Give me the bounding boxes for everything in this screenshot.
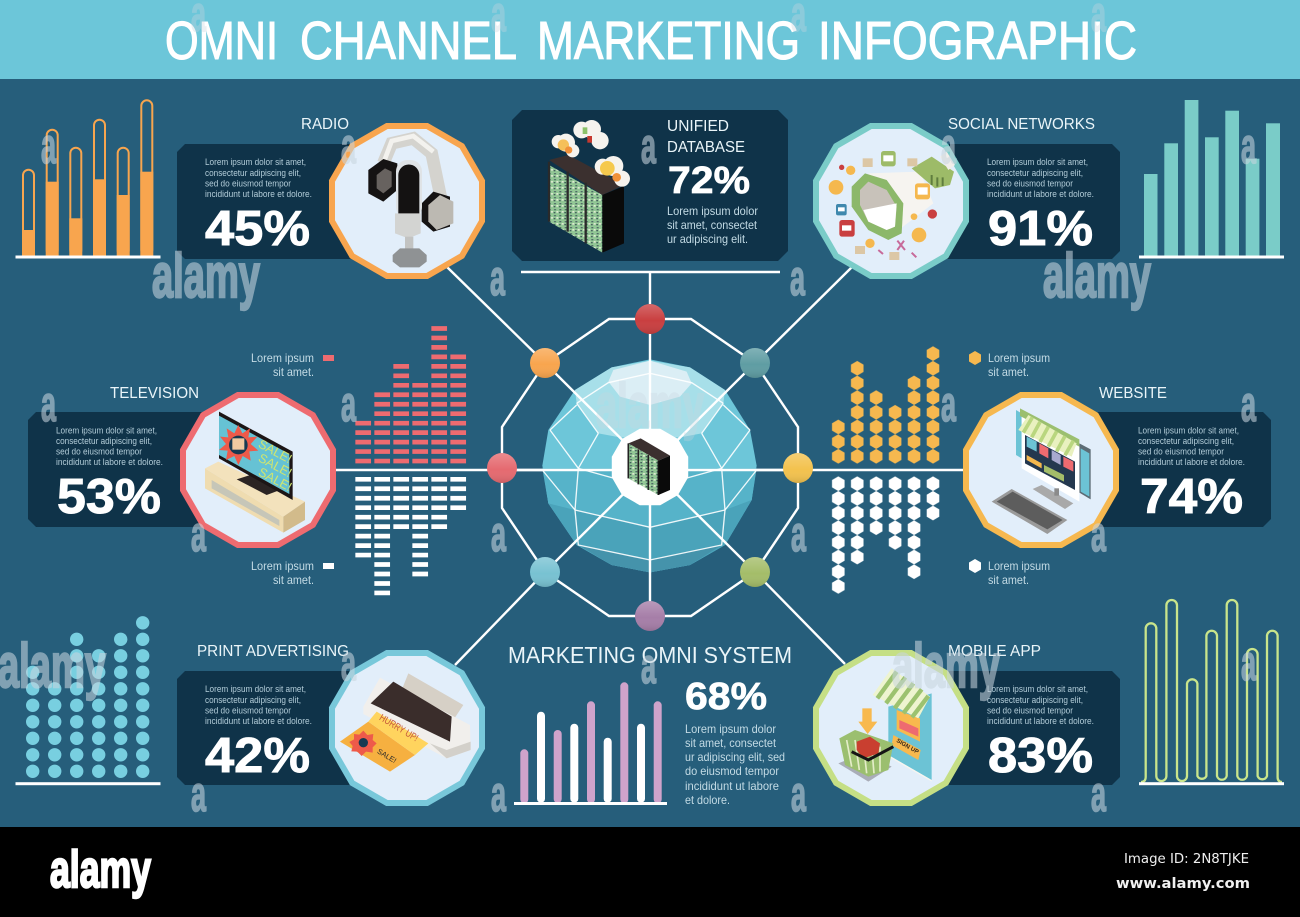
chart: lime outline meander [1139,600,1284,785]
watermark: a [341,376,357,432]
icon: radio badge with microphone and headphones [329,123,485,279]
legend: white [251,559,334,587]
chart: pink and white rounded bars [514,682,667,805]
television description [56,424,163,467]
header band [0,0,1300,79]
legend: white hexagon: sit amet. [988,573,1029,587]
television title: TELEVISION [110,385,199,402]
website title: WEBSITE [1099,385,1167,402]
watermark: a [1091,506,1107,562]
icon: print badge with printer: HURRY UP! [377,712,420,744]
watermark: a [41,118,57,174]
social description: consectetur adipiscing elit, [987,167,1083,178]
print description: sed do eiusmod tempor [205,704,291,716]
database title [667,118,745,156]
radio description [205,156,312,199]
icon: server racks with clouds [549,120,630,253]
social description: incididunt ut labore et dolore. [987,188,1094,199]
chart: blue dot columns [16,622,160,785]
social description [987,156,1094,199]
network spokes [502,319,798,616]
radio title: RADIO [301,116,349,133]
watermark: a [1241,635,1257,691]
print description [205,683,312,726]
footer bar [0,827,1300,917]
watermark: a [191,506,207,562]
radio description: Lorem ipsum dolor sit amet, [205,156,306,167]
mobile description: sed do eiusmod tempor [987,704,1073,716]
print description: Lorem ipsum dolor sit amet, [205,683,306,694]
watermark: a [941,118,957,174]
television description: consectetur adipiscing elit, [56,435,152,446]
watermark: a [1241,376,1257,432]
network octagon ring [502,319,798,616]
social title: SOCIAL NETWORKS [948,116,1095,133]
white hexagon chart [829,476,942,594]
legend: orange hexagon [969,351,1050,379]
title: CHANNEL [300,11,517,71]
panel: radio [177,116,360,259]
mobile description: consectetur adipiscing elit, [987,694,1083,705]
website percentage: 74% [1140,470,1243,524]
omni system description: incididunt ut labore [685,779,779,793]
omni system description: et dolore. [685,793,730,807]
watermark: a [341,635,357,691]
orange hexagon chart [829,346,942,464]
icon: television badge: SALE! [256,437,294,466]
title: OMNI [165,11,278,71]
title: MARKETING [537,11,800,71]
legend: white hexagon [969,559,1050,587]
radio description: sed do eiusmod tempor [205,178,291,188]
watermark: a [941,376,957,432]
omni system description [685,722,785,807]
panel: print advertising [177,643,360,785]
television description: sed do eiusmod tempor [56,446,142,456]
radio percentage: 45% [205,202,310,256]
icon: social badge with megaphone [813,123,969,279]
mobile description: Lorem ipsum dolor sit amet, [987,683,1088,694]
radio description: consectetur adipiscing elit, [205,167,301,178]
watermark: a [641,638,657,694]
panel: mobile app [940,643,1120,785]
watermark: a [491,766,507,822]
social percentage: 91% [988,202,1093,256]
omni system description: Lorem ipsum dolor [685,722,776,736]
omni system description: ur adipiscing elit, sed [685,750,785,764]
watermark: alamy [1043,242,1151,311]
watermark: a [790,250,806,306]
icon: television badge: SALE! [256,451,294,480]
watermark: a [490,250,506,306]
watermark: alamy [596,372,704,441]
legend: orange hexagon: Lorem ipsum [988,351,1050,365]
mobile title: MOBILE APP [948,643,1041,660]
social description: sed do eiusmod tempor [987,178,1073,188]
footer logo: alamy [50,841,151,899]
icon: television badge: SALE! [256,465,294,494]
white bar chart [363,477,458,595]
database description: Lorem ipsum dolor [667,204,758,218]
print description: incididunt ut labore et dolore. [205,715,312,726]
website description: sed do eiusmod tempor [1138,446,1224,456]
watermark: a [191,766,207,822]
database description: ur adipiscing elit. [667,232,748,246]
icon: website badge [963,392,1119,548]
icon: print badge with printer: SALE! [376,747,398,765]
omni system description: sit amet, consectet [685,736,777,750]
legend: white: sit amet. [273,573,314,587]
watermark: alamy [152,242,260,311]
legend: orange hexagon: sit amet. [988,365,1029,379]
icon: mobile badge with storefront and basket: SIGN UP [895,738,919,756]
legend: white: Lorem ipsum [251,559,314,573]
panel: website [1090,385,1271,527]
footer image id: Image ID: 2N8TJKE [1124,851,1249,867]
television percentage: 53% [57,470,161,524]
watermark: a [1091,766,1107,822]
chart: orange outlined bars [16,100,160,258]
icon: television badge [180,392,336,548]
database title: UNIFIED [667,118,729,135]
watermark: alamy [892,632,1000,701]
title [165,11,1137,71]
print title: PRINT ADVERTISING [197,643,349,660]
omni system percentage: 68% [685,676,767,718]
social description: Lorem ipsum dolor sit amet, [987,156,1088,167]
print description: consectetur adipiscing elit, [205,694,301,705]
red bar chart [363,326,458,463]
legend: red [251,351,334,379]
legend: red: sit amet. [273,365,314,379]
chart: teal bars [1139,100,1284,258]
heading: marketing omni system: MARKETING OMNI SYSTEM [508,642,792,668]
watermark: alamy [0,632,106,701]
connector lines [336,267,964,665]
mobile description [987,683,1094,726]
footer url: www.alamy.com [1116,876,1250,892]
watermark: a [41,376,57,432]
website description [1138,424,1245,467]
database title: DATABASE [667,139,745,156]
watermark: a [791,506,807,562]
watermark: a [791,766,807,822]
central sphere [542,359,757,572]
print percentage: 42% [205,729,310,783]
radio description: incididunt ut labore et dolore. [205,188,312,199]
television description: Lorem ipsum dolor sit amet, [56,424,157,436]
television description: incididunt ut labore et dolore. [56,456,163,467]
panel: social networks [940,116,1120,259]
mobile percentage: 83% [988,729,1093,783]
watermark: a [491,506,507,562]
website description: incididunt ut labore et dolore. [1138,456,1245,467]
panel: television [28,385,210,527]
watermark: a [641,118,657,174]
mobile description: incididunt ut labore et dolore. [987,715,1094,726]
website description: Lorem ipsum dolor sit amet, [1138,424,1239,436]
database description: sit amet, consectet [667,218,758,232]
legend: white hexagon: Lorem ipsum [988,559,1050,573]
watermark: a [341,118,357,174]
panel: unified database [512,110,788,261]
center hub with server icon [612,429,688,505]
legend: red: Lorem ipsum [251,351,314,365]
omni system description: do eiusmod tempor [685,764,779,778]
network nodes [487,304,813,631]
website description: consectetur adipiscing elit, [1138,435,1234,446]
watermark: a [1241,118,1257,174]
icon: print badge with printer [329,650,485,806]
icon: mobile badge with storefront and basket [813,650,969,806]
database description [667,204,758,246]
database percentage: 72% [668,160,750,202]
title: INFOGRAPHIC [818,11,1137,71]
